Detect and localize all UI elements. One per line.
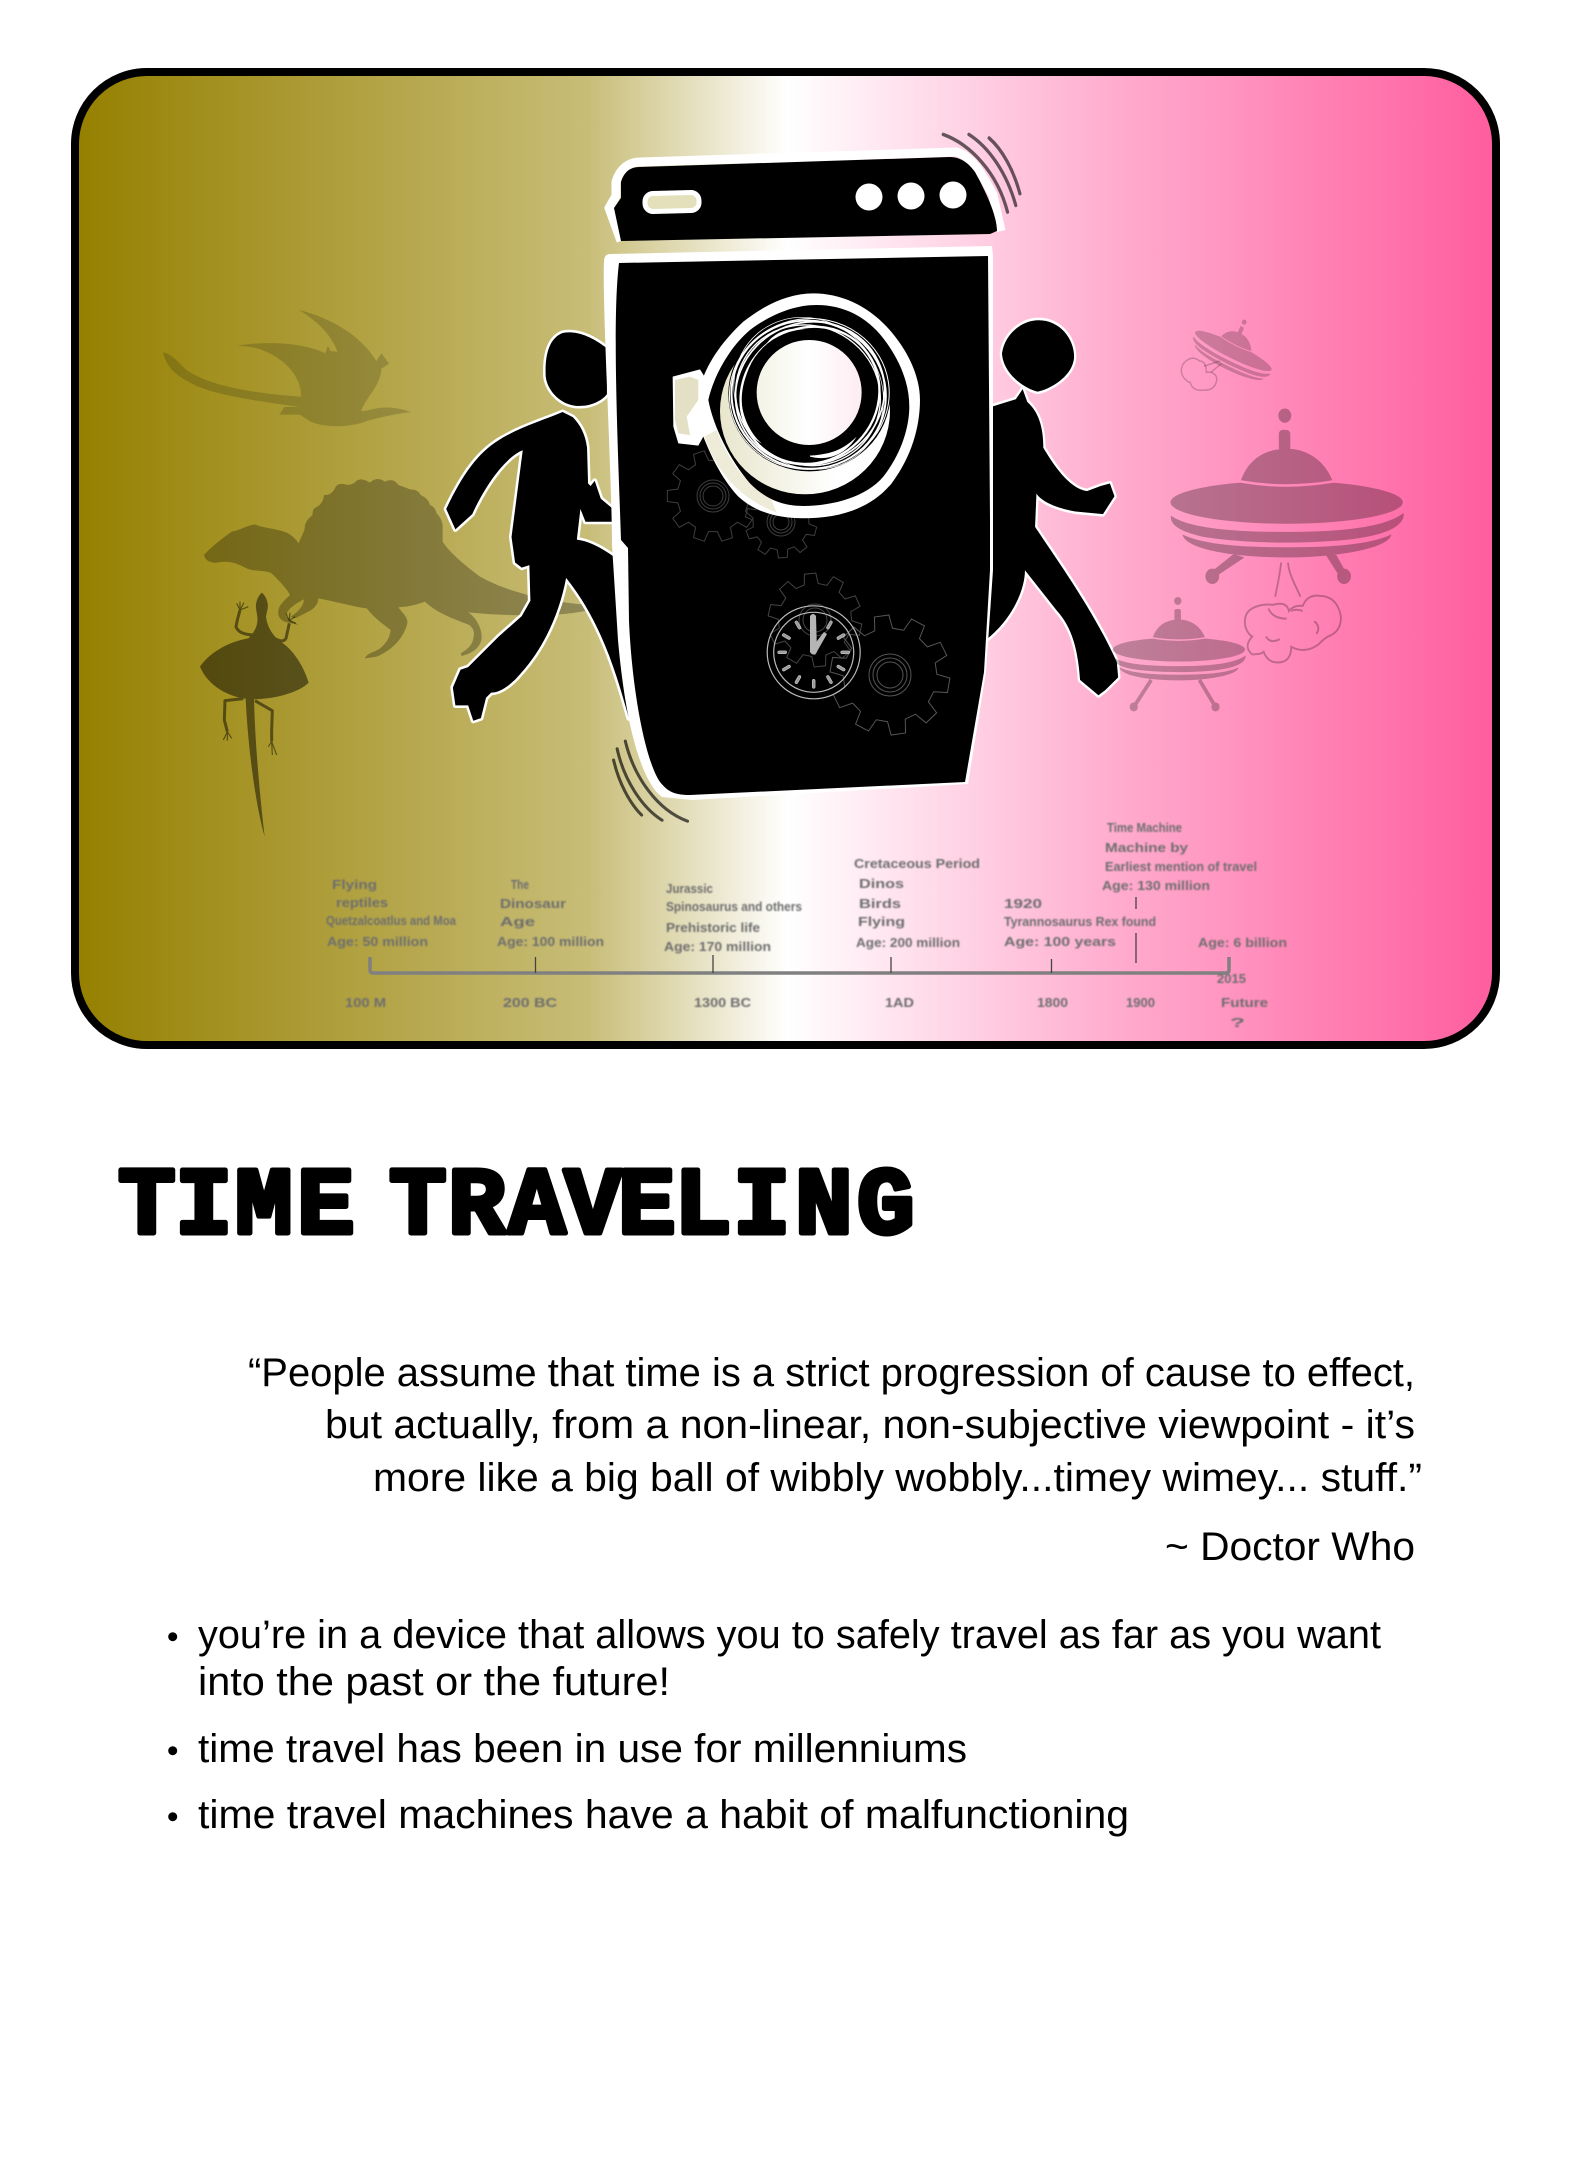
slot button — [645, 192, 699, 212]
head — [1002, 320, 1074, 392]
door pale crescent — [720, 328, 890, 494]
silhouette: distant tilted ufo — [1188, 301, 1284, 388]
timeline labels: Time Machine — [1107, 820, 1182, 835]
machine body white outline — [604, 246, 993, 800]
timeline labels: 200 BC — [503, 995, 558, 1010]
door outer ring — [698, 293, 920, 518]
body — [446, 412, 629, 721]
lizard toes — [223, 602, 296, 755]
timeline labels: Tyrannosaurus Rex found — [1004, 914, 1156, 929]
timeline labels — [326, 820, 1287, 1030]
bullet 1: you’re in a device that allows you to safely travel as far as you want — [198, 1613, 1381, 1657]
washing machine — [604, 152, 1001, 800]
silhouette: pterosaur — [163, 310, 411, 426]
timeline labels: 2015 — [1217, 971, 1246, 986]
illustration: washing machine time travel scene — [163, 134, 1404, 1030]
figure: running man right — [984, 320, 1118, 695]
body — [984, 389, 1118, 695]
timeline axis — [370, 957, 1229, 973]
bullet 2: time travel has been in use for millenniums — [198, 1727, 967, 1771]
timeline labels: Flying — [332, 877, 377, 892]
motion lines: bottom left — [614, 741, 688, 821]
title: TIME TRAVELING — [118, 1153, 915, 1262]
quote: but actually, from a non-linear, non-subjective viewpoint - it’s — [325, 1403, 1415, 1447]
lizard head and tail — [246, 593, 277, 837]
lizard frill — [200, 637, 309, 699]
timeline ticks — [536, 897, 1136, 973]
quote: more like a big ball of wibbly wobbly...timey wimey... stuff.” — [373, 1456, 1422, 1500]
quote: “People assume that time is a strict progression of cause to effect, — [248, 1351, 1415, 1395]
timeline labels: reptiles — [336, 895, 388, 910]
timeline labels: Age: 200 million — [856, 935, 960, 950]
timeline labels: 1AD — [885, 995, 914, 1010]
timeline labels: Age: 170 million — [664, 939, 771, 954]
timeline labels: Age: 130 million — [1102, 878, 1210, 893]
door glass — [757, 340, 862, 445]
timeline labels: Jurassic — [666, 881, 713, 896]
timeline labels: Cretaceous Period — [854, 856, 980, 871]
timeline labels: Age: 100 years — [1004, 934, 1116, 949]
figure: running man left — [446, 332, 629, 721]
bullet 1: into the past or the future! — [198, 1660, 670, 1704]
timeline labels: 1300 BC — [694, 995, 752, 1010]
timeline — [326, 820, 1287, 1030]
silhouette: frilled lizard — [200, 593, 309, 837]
lizard limbs — [224, 610, 289, 742]
timeline labels: Spinosaurus and others — [666, 899, 802, 914]
timeline labels: Earliest mention of travel — [1105, 859, 1257, 874]
lid — [614, 157, 997, 241]
timeline labels: Birds — [859, 896, 901, 911]
timeline labels: Age: 50 million — [327, 934, 428, 949]
lid outline — [609, 152, 1001, 241]
hinge — [673, 369, 707, 446]
timeline labels: Future — [1221, 995, 1268, 1010]
scribble core — [728, 317, 890, 471]
smoke cloud large — [1245, 563, 1341, 662]
gear upper left — [667, 451, 759, 541]
quote — [248, 1351, 1422, 1569]
scribble rings — [703, 287, 914, 500]
gears — [667, 451, 959, 743]
timeline labels: The — [511, 877, 529, 892]
timeline labels: Quetzalcoatlus and Moa — [326, 913, 457, 928]
small ufo legs — [1134, 680, 1215, 707]
bullet 3: time travel machines have a habit of malfunctioning — [198, 1793, 1129, 1837]
timeline labels: Machine by — [1105, 840, 1189, 855]
gear upper right — [744, 508, 818, 558]
timeline labels: Prehistoric life — [666, 920, 760, 935]
motion lines: top right — [943, 134, 1020, 212]
timeline labels: Dinos — [859, 876, 904, 891]
timeline labels: Dinosaur — [500, 896, 566, 911]
silhouette: small ufo — [1113, 597, 1246, 712]
bullet 1 — [168, 1613, 1381, 1704]
timeline labels: ? — [1230, 1015, 1245, 1030]
clock — [767, 606, 860, 699]
timeline labels: 1800 — [1037, 995, 1068, 1010]
timeline labels: 1900 — [1126, 995, 1155, 1010]
timeline labels: Flying — [858, 914, 905, 929]
smoke cloud small — [1181, 358, 1221, 390]
silhouette: large ufo — [1170, 408, 1404, 584]
timeline labels: Age: 100 million — [497, 934, 604, 949]
machine body — [616, 256, 990, 795]
bullet list — [168, 1613, 1381, 1837]
panel: illustration background — [75, 72, 1496, 1045]
timeline labels: 1920 — [1004, 896, 1042, 911]
silhouette: spinosaurus — [204, 479, 588, 658]
indicator lights — [856, 182, 966, 210]
gear lower right — [830, 614, 950, 736]
door — [673, 287, 920, 518]
timeline labels: 100 M — [345, 995, 386, 1010]
clock ticks — [778, 620, 850, 688]
timeline labels: Age: 6 billion — [1198, 935, 1287, 950]
head — [546, 332, 607, 406]
clock hands — [810, 614, 817, 654]
timeline labels: Age — [500, 914, 535, 929]
door black ring — [708, 305, 909, 506]
black inner ring — [744, 329, 874, 456]
gear behind clock — [768, 572, 862, 668]
quote attribution: ~ Doctor Who — [1165, 1525, 1415, 1569]
